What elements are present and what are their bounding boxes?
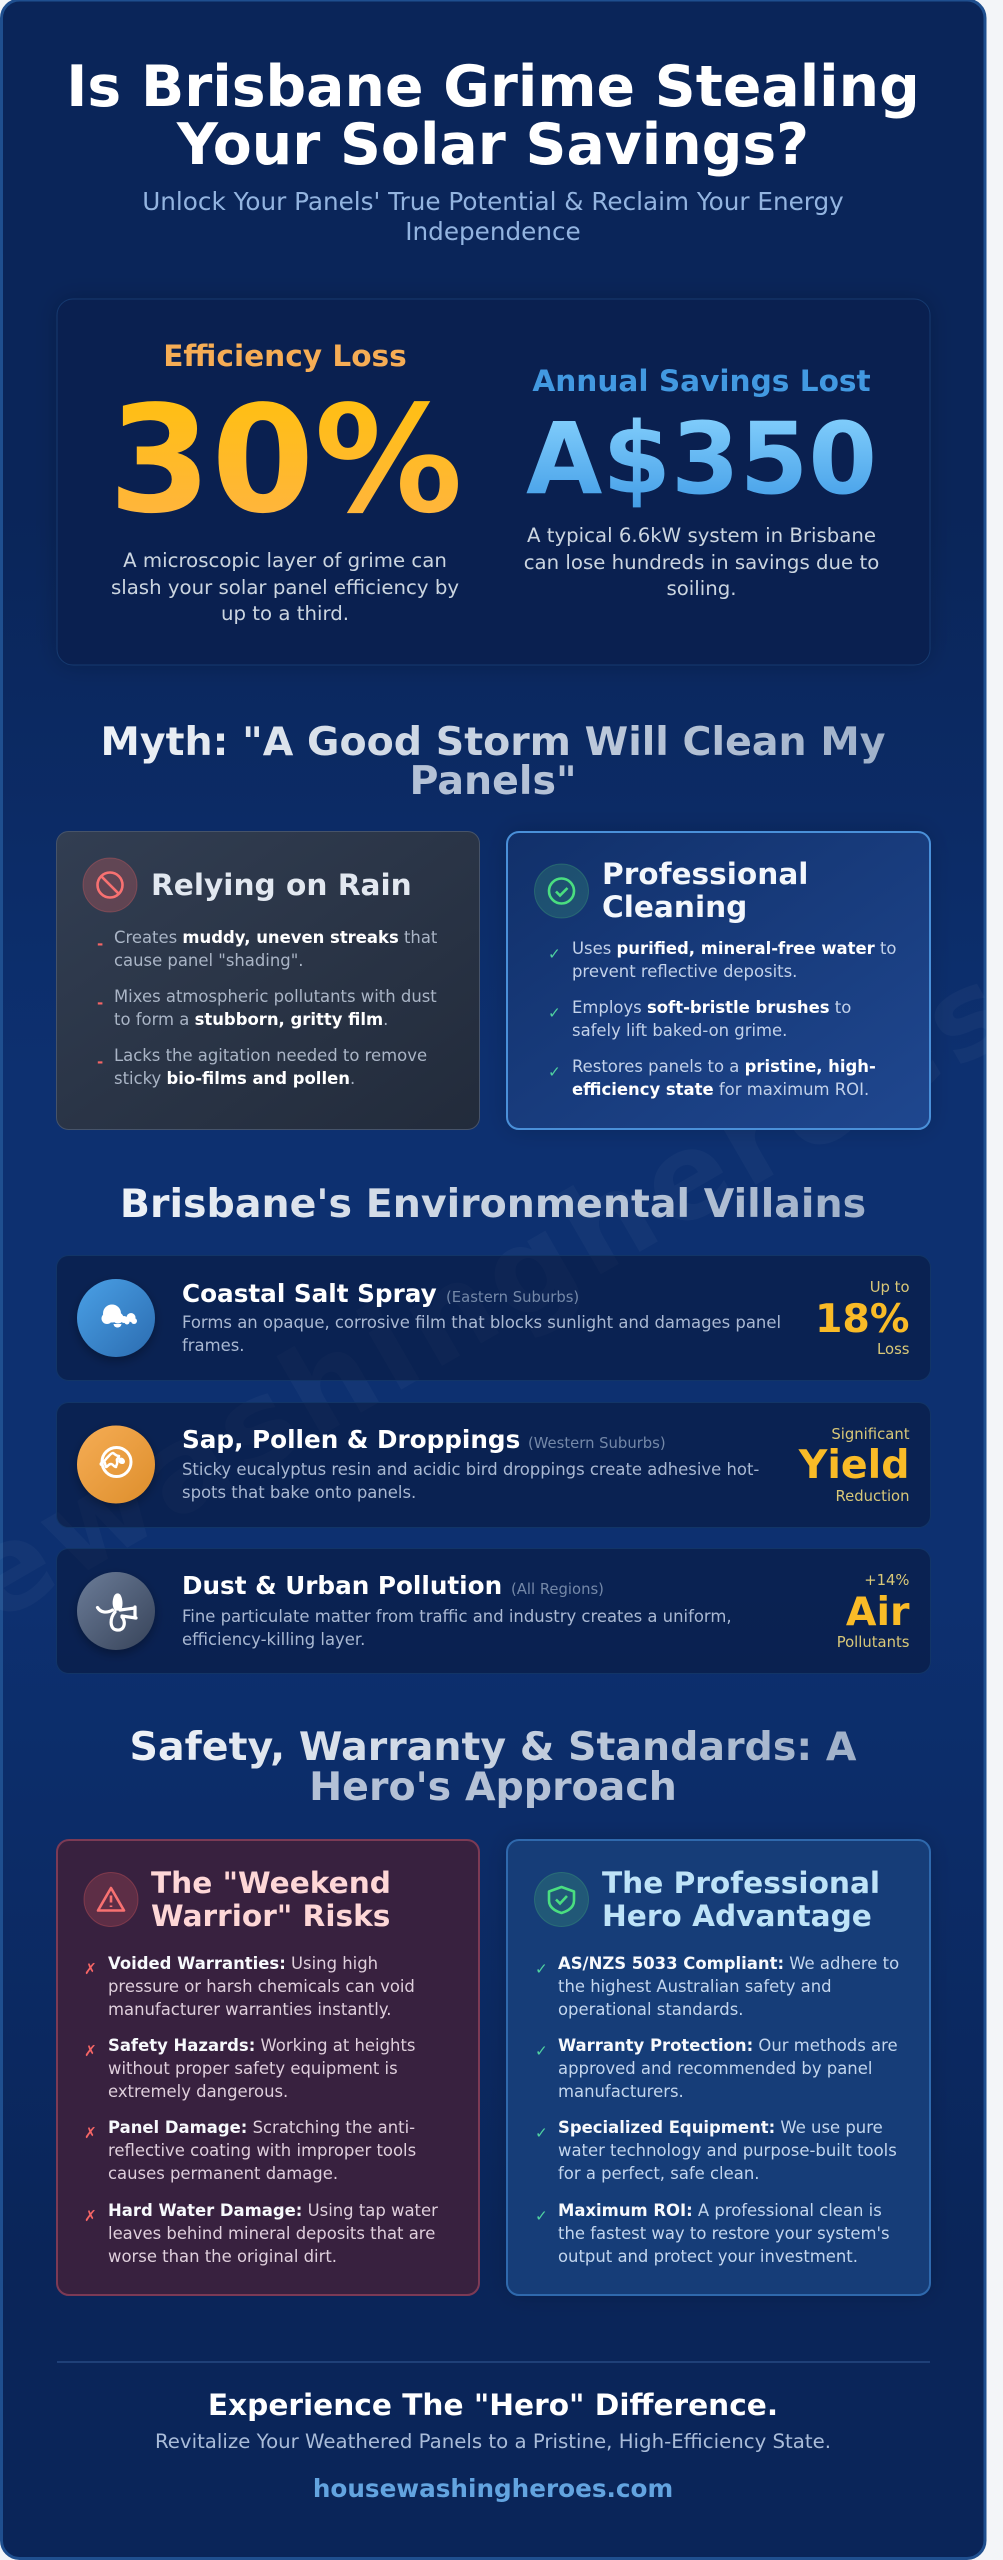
list: water technology and purpose-built tools: [558, 2141, 897, 2160]
stat: +14%: [864, 1572, 910, 1589]
list: -: [97, 935, 103, 953]
list: manufacturers.: [558, 2082, 684, 2101]
list: ✓: [535, 2207, 548, 2225]
website: housewashingheroes.com: [313, 2474, 673, 2503]
text: [182, 1425, 759, 1502]
stat: [837, 1572, 910, 1651]
footer subline: Revitalize Your Weathered Panels to a Pristine, High-Efficiency State.: [155, 2430, 831, 2453]
list: for a perfect, safe clean.: [558, 2164, 759, 2183]
list: pressure or harsh chemicals can void: [108, 1977, 415, 1996]
text: [182, 1571, 732, 1649]
villain: coastal salt spray: [56, 1256, 930, 1380]
panel title: Professional: [602, 857, 808, 891]
stat: annual savings lost: soiling.: [666, 577, 737, 600]
list: worse than the original dirt.: [108, 2247, 337, 2266]
list: Employs soft-bristle brushes to: [572, 998, 851, 1017]
stat: [798, 1426, 910, 1505]
text: efficiency-killing layer.: [182, 1630, 365, 1649]
stat: Significant: [831, 1426, 910, 1443]
list: the fastest way to restore your system's: [558, 2224, 890, 2243]
list: efficiency state for maximum ROI.: [572, 1080, 869, 1099]
stat: efficiency loss: A microscopic layer of grime can: [123, 549, 447, 572]
panel title: [151, 1866, 391, 1933]
stat: efficiency loss: 30%: [108, 374, 463, 546]
title: Your Solar Savings?: [176, 112, 809, 178]
panel title: [602, 1866, 880, 1933]
list: extremely dangerous.: [108, 2082, 288, 2101]
panel title: Cleaning: [602, 890, 747, 924]
villain: dust and urban pollution: [56, 1548, 930, 1674]
text: (All Regions): [511, 1581, 604, 1598]
heading: myth: [101, 719, 886, 804]
subtitle: Independence: [405, 217, 581, 246]
list: Specialized Equipment: We use pure: [558, 2118, 883, 2137]
list: ✓: [548, 1063, 561, 1081]
panel title: Warrior" Risks: [151, 1899, 390, 1933]
stat: efficiency loss: up to a third.: [221, 602, 349, 625]
list: Uses purified, mineral-free water to: [572, 939, 896, 958]
icon: dust knot: [77, 1572, 155, 1654]
text: (Eastern Suburbs): [446, 1289, 579, 1306]
text: [182, 1279, 781, 1355]
list: leaves behind mineral deposits that are: [108, 2224, 435, 2243]
icon: cloud: [77, 1279, 155, 1361]
title: [66, 54, 920, 178]
stat: annual savings lost: can lose hundreds in savings due to: [524, 551, 879, 574]
text: Sap, Pollen & Droppings: [182, 1425, 520, 1454]
text: Fine particulate matter from traffic and industry creates a uniform,: [182, 1607, 732, 1626]
list: ✓: [548, 945, 561, 963]
list: ✗: [84, 1960, 97, 1978]
stat: Reduction: [836, 1488, 910, 1505]
panel: professional hero advantage: [507, 1840, 930, 2295]
footer: [155, 2388, 831, 2503]
stat: Up to: [870, 1279, 910, 1296]
list: Creates muddy, uneven streaks that: [114, 928, 438, 947]
stat: 18%: [815, 1296, 910, 1342]
list: ✓: [535, 2124, 548, 2142]
list: approved and recommended by panel: [558, 2059, 872, 2078]
icon: ring: [77, 1426, 155, 1507]
panel title: Relying on Rain: [151, 868, 412, 902]
icon: check circle: [534, 864, 588, 918]
list: safely lift baked-on grime.: [572, 1021, 787, 1040]
list: [84, 1954, 438, 2266]
stat: efficiency loss: Efficiency Loss: [163, 339, 407, 373]
heading: safety: Safety, Warranty & Standards: A: [130, 1724, 857, 1770]
heading: villains: Brisbane's Environmental Villains: [120, 1181, 866, 1227]
list: ✗: [84, 2207, 97, 2225]
list: cause panel "shading".: [114, 951, 304, 970]
heading: myth: Panels": [409, 758, 577, 804]
stat: efficiency loss: [108, 339, 463, 625]
title: Is Brisbane Grime Stealing: [66, 54, 920, 120]
stat: Pollutants: [837, 1634, 910, 1651]
list: [535, 1954, 899, 2266]
stat: Yield: [798, 1442, 910, 1488]
stat: annual savings lost: [524, 364, 879, 600]
icon: ban: [83, 858, 137, 912]
text: spots that bake onto panels.: [182, 1483, 416, 1502]
list: Voided Warranties: Using high: [108, 1954, 378, 1973]
list: without proper safety equipment is: [108, 2059, 398, 2078]
text: Sticky eucalyptus resin and acidic bird droppings create adhesive hot-: [182, 1460, 759, 1479]
text: Coastal Salt Spray: [182, 1279, 437, 1308]
list: ✓: [535, 2042, 548, 2060]
panel title: [602, 857, 808, 924]
list: Warranty Protection: Our methods are: [558, 2036, 898, 2055]
list: ✓: [548, 1004, 561, 1022]
icon: shield check: [534, 1872, 588, 1926]
list: -: [97, 994, 103, 1012]
list: operational standards.: [558, 2000, 743, 2019]
list: Hard Water Damage: Using tap water: [108, 2201, 438, 2220]
heading: myth: Myth: "A Good Storm Will Clean My: [101, 719, 886, 765]
panel title: The "Weekend: [151, 1866, 391, 1900]
icon: warning triangle: [84, 1872, 138, 1926]
list: output and protect your investment.: [558, 2247, 858, 2266]
list: causes permanent damage.: [108, 2164, 338, 2183]
list: [97, 928, 438, 1088]
stat: Loss: [877, 1341, 910, 1358]
list: AS/NZS 5033 Compliant: We adhere to: [558, 1954, 899, 1973]
stat: efficiency loss: slash your solar panel efficiency by: [111, 576, 459, 599]
list: [548, 939, 896, 1099]
stat: annual savings lost: A typical 6.6kW system in Brisbane: [527, 524, 876, 547]
heading: safety: [130, 1724, 857, 1810]
panel: weekend warrior risks: [57, 1840, 479, 2295]
list: ✗: [84, 2124, 97, 2142]
panel: relying on rain: [56, 832, 480, 1130]
list: Safety Hazards: Working at heights: [108, 2036, 415, 2055]
stat: [815, 1279, 910, 1358]
villain: sap, pollen and droppings: [56, 1402, 930, 1528]
panel title: The Professional: [602, 1866, 880, 1900]
list: Mixes atmospheric pollutants with dust: [114, 987, 437, 1006]
stat: annual savings lost: Annual Savings Lost: [532, 364, 871, 398]
list: ✗: [84, 2042, 97, 2060]
list: the highest Australian safety and: [558, 1977, 832, 1996]
list: Lacks the agitation needed to remove: [114, 1046, 427, 1065]
text: Forms an opaque, corrosive film that blocks sunlight and damages panel: [182, 1313, 781, 1332]
list: Maximum ROI: A professional clean is: [558, 2201, 882, 2220]
list: Restores panels to a pristine, high-: [572, 1057, 876, 1076]
list: manufacturer warranties instantly.: [108, 2000, 391, 2019]
subtitle: Unlock Your Panels' True Potential & Reclaim Your Energy: [142, 187, 844, 216]
list: to form a stubborn, gritty film.: [114, 1010, 388, 1029]
stat: annual savings lost: A$350: [526, 402, 877, 517]
text: (Western Suburbs): [528, 1435, 666, 1452]
panel: professional cleaning: [507, 832, 930, 1129]
list: sticky bio-films and pollen.: [114, 1069, 355, 1088]
list: reflective coating with improper tools: [108, 2141, 416, 2160]
text: frames.: [182, 1336, 245, 1355]
list: Panel Damage: Scratching the anti-: [108, 2118, 415, 2137]
panel: headline stats: [57, 299, 930, 665]
subtitle: [142, 187, 844, 246]
panel title: Hero Advantage: [602, 1899, 872, 1933]
text: Dust & Urban Pollution: [182, 1571, 502, 1600]
list: -: [97, 1053, 103, 1071]
stat: Air: [846, 1589, 910, 1635]
list: prevent reflective deposits.: [572, 962, 797, 981]
list: ✓: [535, 1960, 548, 1978]
footer headline: Experience The "Hero" Difference.: [208, 2388, 778, 2422]
heading: safety: Hero's Approach: [309, 1764, 677, 1810]
